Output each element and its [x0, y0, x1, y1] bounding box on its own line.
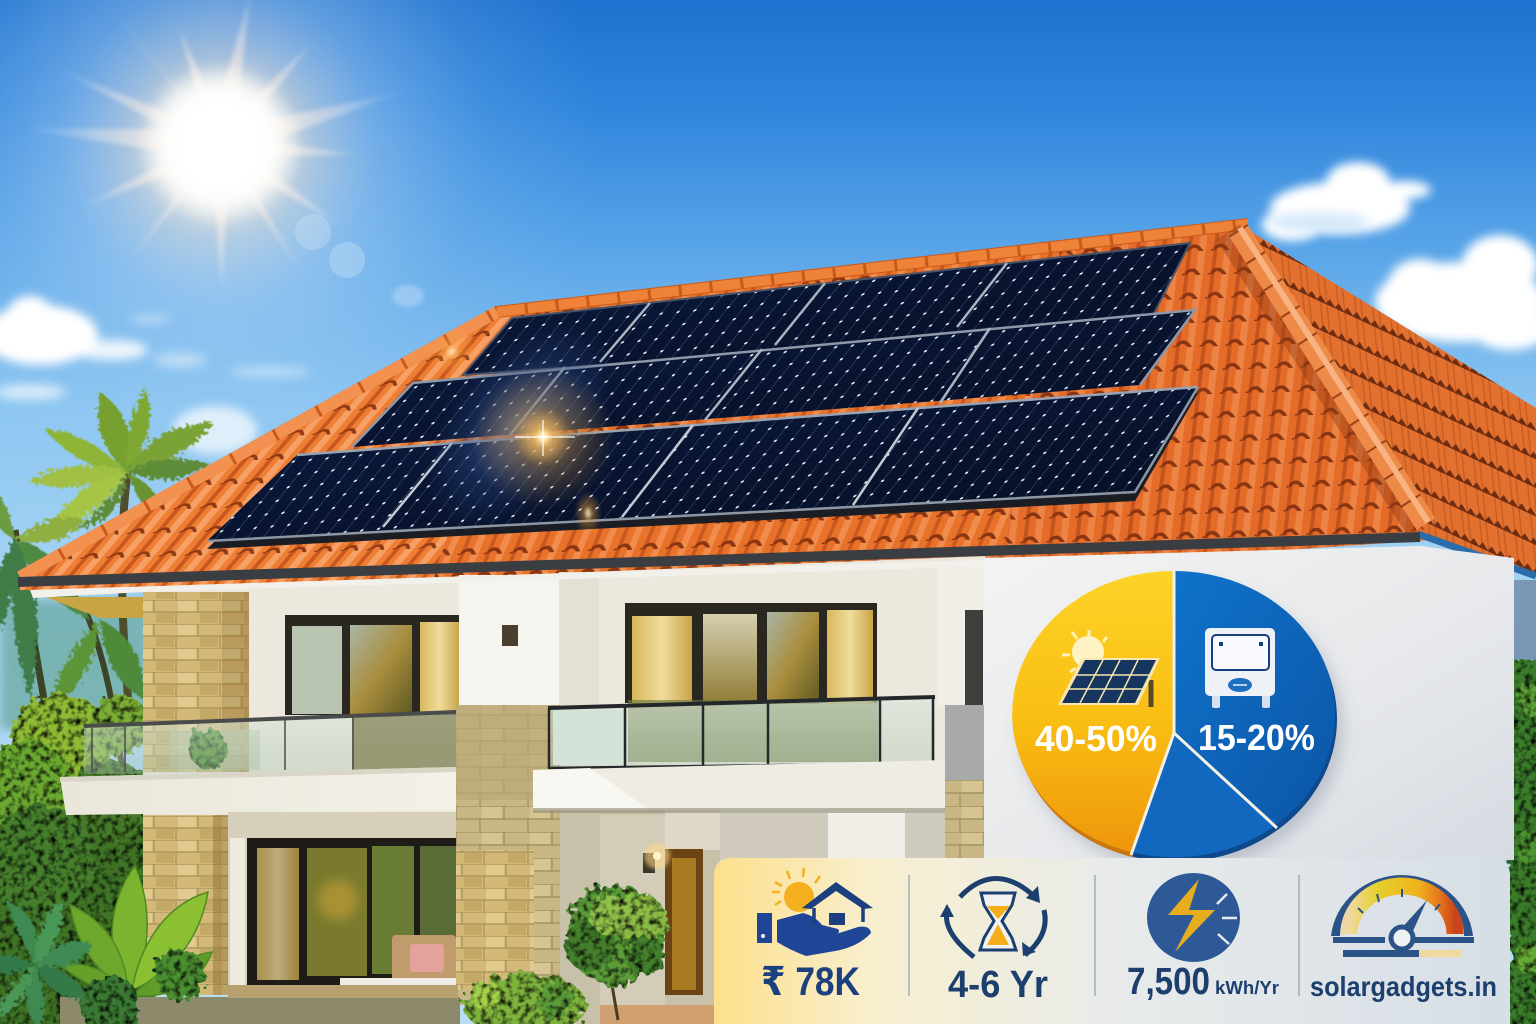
bottom stats strip: [714, 858, 1510, 1024]
upper left window: [285, 615, 459, 715]
eave fascia and gutter: [30, 546, 1425, 598]
pie depth edge: [1015, 576, 1337, 862]
roof ridge lines: [20, 224, 1428, 577]
slice: blue: [1174, 571, 1335, 824]
lower wall right: [560, 810, 720, 1024]
centre stone pillar: [456, 705, 560, 1005]
stone pillar lower left: [143, 815, 228, 995]
value: ₹ 78K: ₹ 78K: [761, 960, 860, 1004]
panel row: top: [463, 243, 1190, 375]
value: 7,500 kWh/Yr: 7,500: [1127, 961, 1210, 1003]
panel row: bottom: [207, 387, 1198, 549]
right narrow window: [965, 610, 983, 705]
shrub near pillar: [80, 949, 206, 1024]
roof: right hip slope: [1240, 225, 1536, 575]
solar panel array: [207, 243, 1198, 562]
background foliage left: [0, 693, 155, 1024]
label: 15-20%: 15-20%: [1198, 717, 1315, 758]
upper right window: [625, 603, 877, 704]
entry door: [665, 849, 703, 995]
lower wall left: [228, 812, 456, 998]
palm trees: [0, 388, 215, 860]
slice: gold: [1012, 571, 1174, 852]
roof: front slope tiles: [20, 222, 1430, 590]
sofa: [340, 935, 456, 994]
garden plants: [0, 580, 1536, 1024]
roof: [20, 222, 1536, 590]
left balcony: [60, 712, 456, 815]
sun with rays: [0, 0, 600, 525]
right edge foliage: [1508, 660, 1536, 1024]
right siding and stone: [945, 705, 984, 780]
icon: performance gauge: [1331, 875, 1474, 957]
wall lamp: [502, 625, 518, 646]
eave soffit: [45, 597, 145, 618]
slice: lower blue: [1131, 733, 1277, 857]
banana plant: [60, 866, 212, 996]
value: 7,500 kWh/Yr: kWh/Yr: [1215, 978, 1279, 998]
house facade: [18, 537, 1425, 1024]
icon: solar panel with sun: [1058, 630, 1160, 707]
panel row: middle: [352, 310, 1195, 447]
porch post: [828, 813, 905, 860]
sun reflection on panels: [389, 288, 651, 562]
stone pillar upper left: [143, 592, 249, 772]
pie chart: [1012, 571, 1337, 862]
palm fronds: rear palms: [0, 470, 145, 715]
right edge soffit backdrop: [1510, 580, 1536, 660]
right balcony: [533, 697, 945, 813]
wall panel behind pie chart: [984, 546, 1514, 860]
shrub: tree at entry: [564, 885, 666, 1020]
lower left window: [247, 838, 456, 986]
icon: lightning dial: [1147, 873, 1240, 962]
gutter: right eave: [1418, 534, 1536, 576]
icon: hourglass with cycle arrows: [940, 878, 1045, 957]
upper wall: [143, 556, 985, 815]
label: 40-50%: 40-50%: [1035, 718, 1157, 759]
ground ledge: [60, 997, 460, 1024]
fan palm: [0, 900, 92, 1024]
shrub: front bush: [463, 973, 587, 1024]
value: 4-6 Yr: 4-6 Yr: [948, 964, 1048, 1006]
icon: hand holding sunny house: [757, 868, 873, 956]
palm fronds: tall palm: [28, 388, 215, 535]
icon: inverter: [1205, 628, 1275, 708]
porch lamp: [643, 843, 670, 873]
brand: solargadgets.in: solargadgets.in: [1310, 971, 1497, 1002]
clouds: [0, 162, 1536, 454]
value: 7,500 kWh/Yr: [1127, 961, 1279, 1003]
